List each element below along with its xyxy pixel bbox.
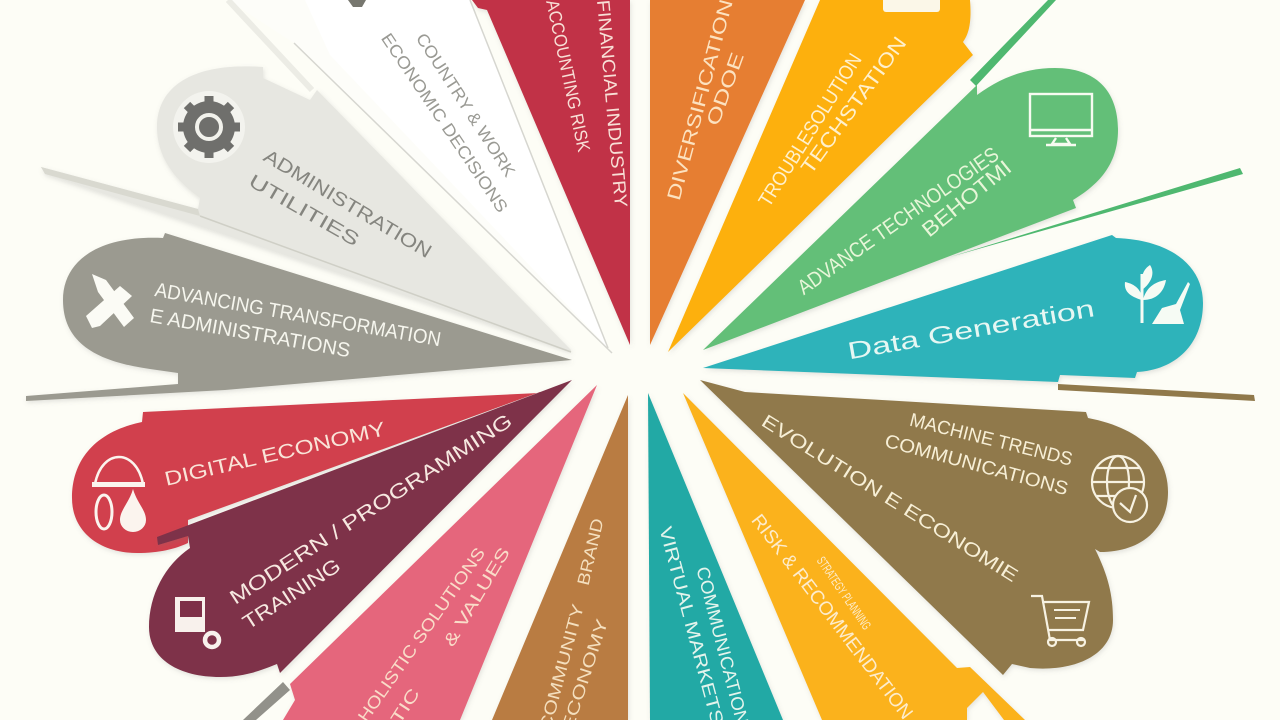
text: bottom teal sector label xyxy=(655,524,752,720)
panel: green sector xyxy=(703,0,1243,350)
text: gray sector label: E ADMINISTRATIONS xyxy=(148,305,352,362)
panel: light gray sector xyxy=(41,66,571,352)
icon: gear xyxy=(173,91,245,163)
text: bottom amber sector label: STRATEGY PLANNING xyxy=(814,554,874,632)
text: brown sector label xyxy=(536,517,612,720)
text: green sector label: BEHOTMI xyxy=(918,156,1016,242)
panel: crimson sector xyxy=(472,0,631,345)
panel: brown sector xyxy=(492,395,628,720)
text: bottom teal sector label: VIRTUAL MARKETS xyxy=(655,524,727,720)
text: crimson sector label: FINANCIAL INDUSTRY xyxy=(593,0,631,208)
icon: white clipboard xyxy=(883,0,940,12)
text: brown sector label: BRAND xyxy=(574,517,608,587)
icon: dome and drops xyxy=(92,457,146,532)
text: pink sector label xyxy=(354,544,514,720)
panel: bottom amber sector xyxy=(683,393,1025,720)
panel: top teal sector xyxy=(703,235,1255,401)
text: gray sector label: ADVANCING TRANSFORMATION xyxy=(153,279,443,351)
icon: box and gear xyxy=(175,597,219,647)
icon: globe xyxy=(1092,456,1147,522)
panel: red sector xyxy=(72,392,560,553)
text: bottom teal sector label: COMMUNICATION xyxy=(692,564,752,720)
panel: bottom teal sector xyxy=(648,393,783,720)
decorative strip: gray xyxy=(243,682,290,720)
text: orange sector label: ODOE xyxy=(703,50,749,129)
decorative strip: green lower xyxy=(950,168,1243,257)
panel: gray sector xyxy=(26,233,572,401)
text: tan sector label: EVOLUTION E ECONOMIE xyxy=(757,411,1021,587)
panel: pink sector xyxy=(243,385,597,720)
text: red sector label: DIGITAL ECONOMY xyxy=(163,418,388,491)
panel: top amber sector xyxy=(668,0,973,352)
decorative strip: green upper xyxy=(970,0,1056,86)
text: orange sector label: DIVERSIFICATION xyxy=(664,0,738,203)
text: light gray sector label xyxy=(245,146,435,263)
panel: tan sector xyxy=(700,380,1168,675)
panel: white sector xyxy=(228,0,612,353)
decorative strip: tan xyxy=(1058,384,1255,401)
panel: maroon sector xyxy=(149,380,572,677)
text: orange sector label xyxy=(664,0,749,203)
text: maroon sector label xyxy=(226,410,516,634)
text: bottom amber sector label: RISK & RECOMMENDATION xyxy=(747,511,916,720)
text: white sector label: COUNTRY & WORK xyxy=(412,30,519,181)
text: maroon sector label: MODERN / PROGRAMMING xyxy=(226,410,516,609)
icon: monitor xyxy=(1030,94,1092,145)
icon: dark partial symbol xyxy=(348,0,366,7)
text: tan sector label: COMMUNICATIONS xyxy=(882,431,1070,500)
icon: shopping cart xyxy=(1031,596,1089,646)
text: maroon sector label: TRAINING xyxy=(239,555,345,634)
text: crimson sector label: ACCOUNTING RISK xyxy=(542,0,594,154)
text: light gray sector label: UTILITIES xyxy=(245,171,363,251)
icon: plant and iron xyxy=(1125,265,1190,324)
text: tan sector label xyxy=(757,410,1075,587)
text: light gray sector label: ADMINISTRATION xyxy=(260,146,435,263)
text: white sector label: ECONOMIC DECISIONS xyxy=(377,30,511,216)
icon: crossed tools xyxy=(86,274,134,328)
text: crimson sector label xyxy=(542,0,631,208)
text: top teal sector label: Data Generation xyxy=(846,295,1097,365)
text: top amber sector label: TECHSTATION xyxy=(797,33,911,178)
panel: orange sector xyxy=(650,0,805,345)
text: tan sector label: MACHINE TRENDS xyxy=(907,410,1075,471)
text: top amber sector label: TROUBLESOLUTION xyxy=(755,50,867,211)
text: pink sector label: & VALUES xyxy=(440,544,514,650)
text: green sector label: ADVANCE TECHNOLOGIES xyxy=(793,143,1003,299)
